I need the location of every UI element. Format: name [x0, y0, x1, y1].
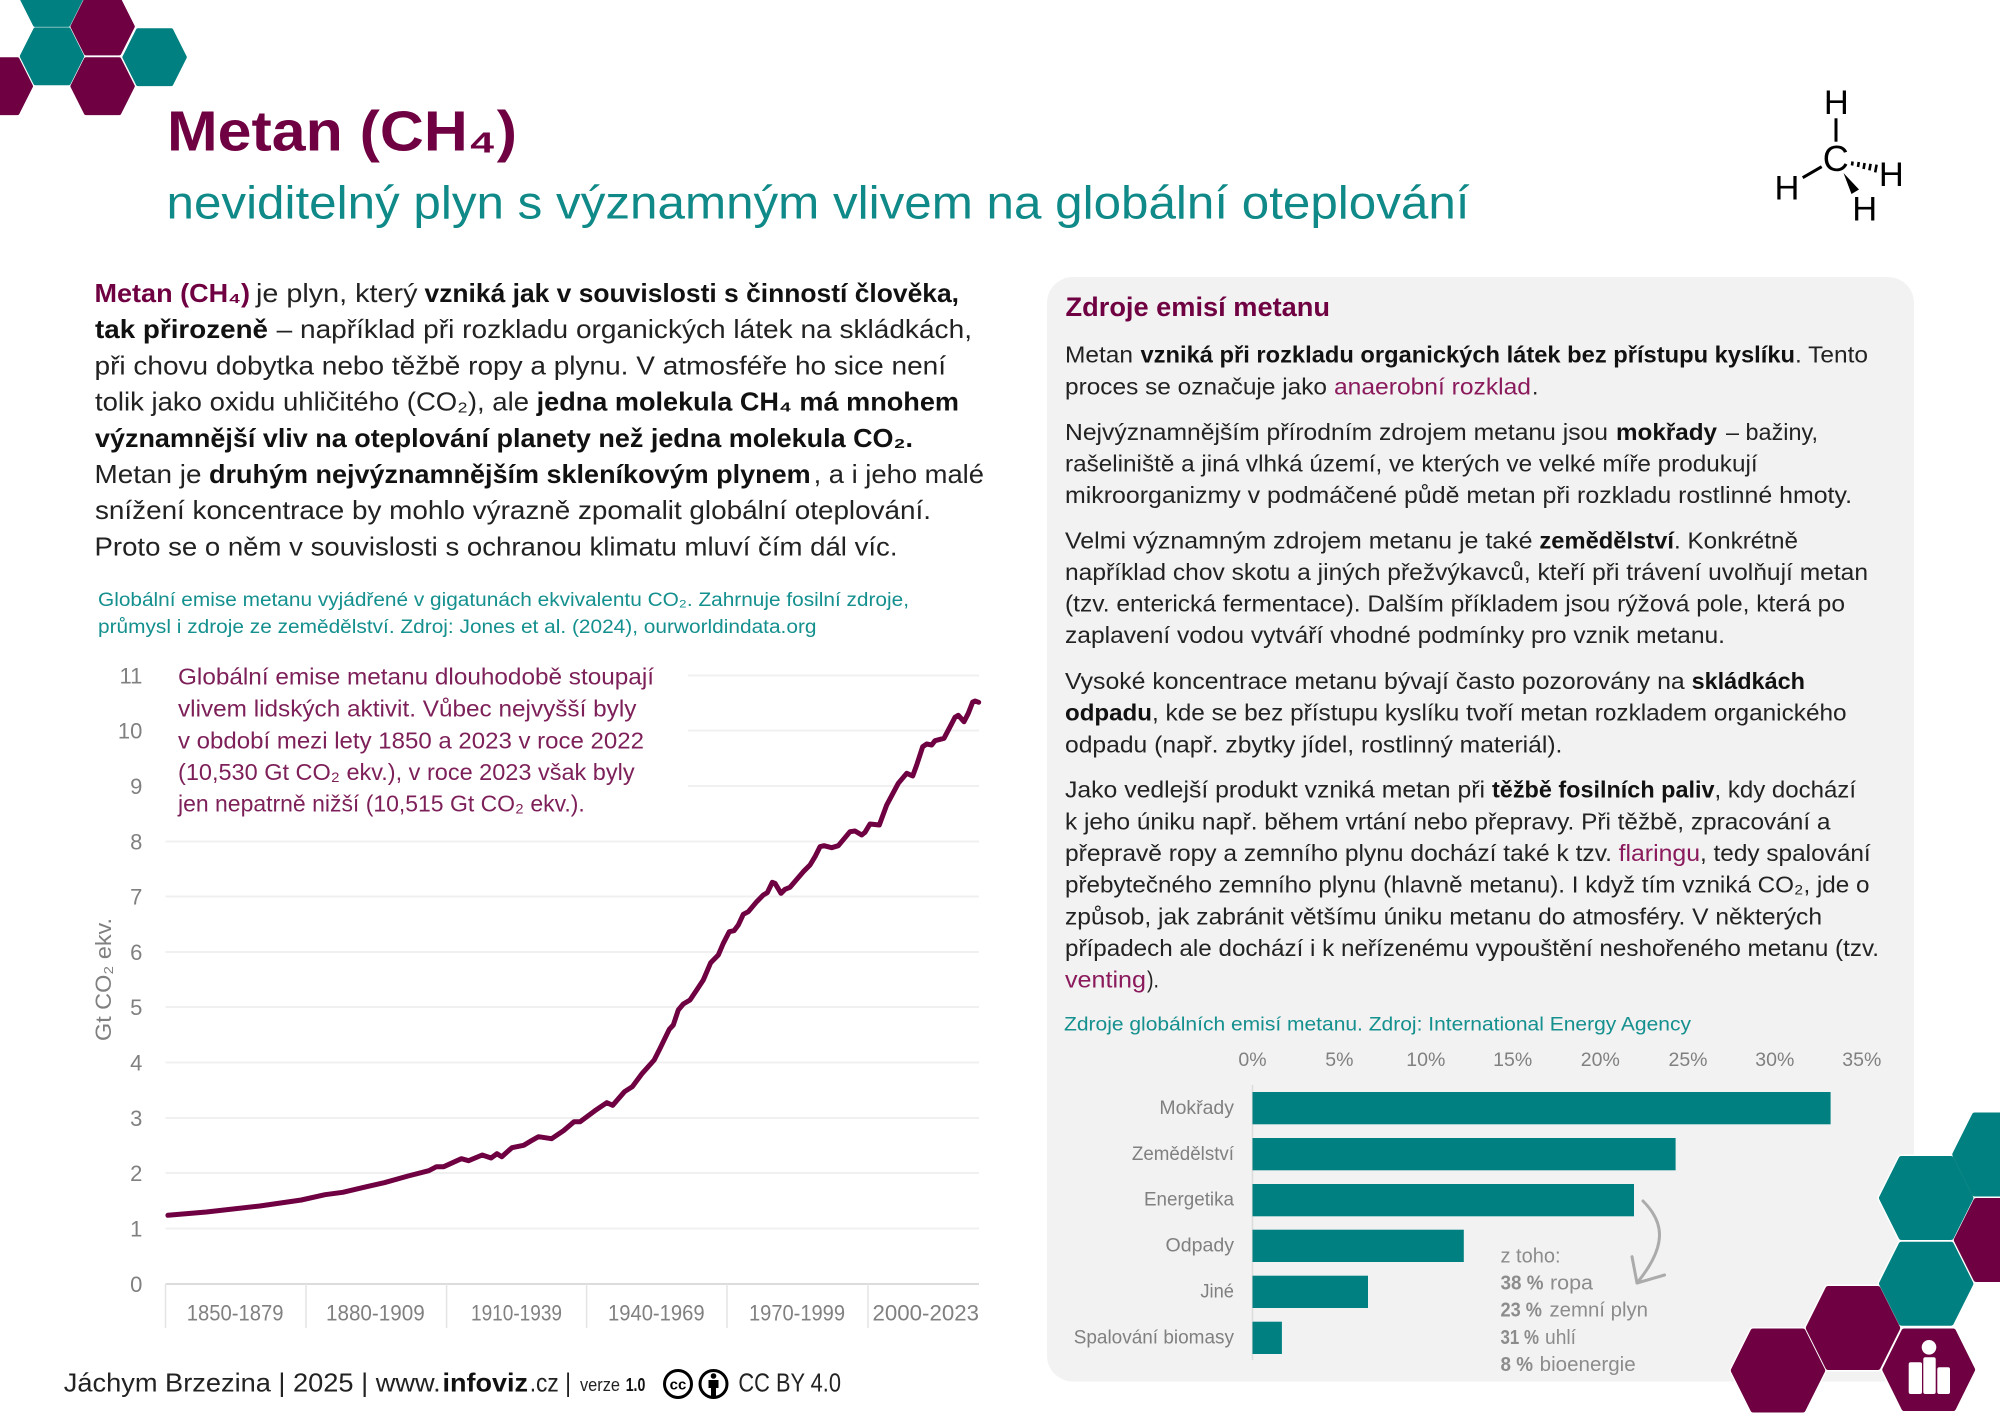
text block: introduction: je plyn, který — [255, 278, 418, 308]
footer: CC BY 4.0 — [738, 1368, 841, 1398]
decorative hexagons bottom right — [1734, 1116, 2000, 1410]
y axis labels: 9 — [130, 774, 142, 799]
percent axis labels — [1238, 1049, 1881, 1071]
callout: energy breakdown — [1500, 1246, 1648, 1376]
chart gridlines — [166, 676, 979, 1284]
bar: energy — [1144, 1184, 1634, 1216]
text block: anaerobic decomposition: . Tento — [1795, 342, 1868, 368]
chart period ticks — [166, 1284, 868, 1328]
y axis labels: 1 — [130, 1216, 142, 1242]
text block: introduction: tolik jako oxidu uhličitého (CO₂), ale — [95, 386, 529, 416]
callout: energy breakdown: ropa — [1550, 1272, 1594, 1294]
text block: introduction — [94, 278, 984, 562]
arrow: energy breakdown — [1632, 1201, 1665, 1283]
footer: infoviz — [442, 1368, 528, 1398]
icon: attribution — [700, 1370, 727, 1398]
text block: landfills: odpadu — [1065, 700, 1152, 726]
bar chart: sources of global methane emissions — [1074, 1049, 1881, 1360]
bar: waste — [1166, 1230, 1464, 1262]
callout: energy breakdown: zemní plyn — [1550, 1300, 1648, 1322]
text block: fossil fuels: k jeho úniku např. během vrtání nebo přepravy. Při těžbě, zpracování a — [1065, 808, 1831, 834]
callout: energy breakdown: uhlí — [1545, 1327, 1576, 1349]
text block: introduction: – například při rozkladu organických látek na skládkách, — [277, 314, 972, 344]
text block: introduction: vzniká jak v souvislosti s činností člověka, — [424, 278, 959, 308]
percent axis labels: 25% — [1668, 1049, 1708, 1071]
icon: methane molecule structure: H — [1775, 169, 1799, 207]
y axis labels: 11 — [120, 664, 142, 688]
y axis labels: 3 — [130, 1106, 142, 1131]
footer — [64, 1368, 841, 1398]
bar: biomass burning: Spalování biomasy — [1074, 1326, 1234, 1348]
y axis labels: 8 — [130, 830, 142, 854]
text block: fossil fuels: Jako vedlejší produkt vzniká metan při — [1065, 776, 1485, 802]
text block: wetlands: mikroorganizmy v podmáčené půdě metan při rozkladu rostlinné hmoty. — [1065, 482, 1852, 508]
text block: wetlands: mokřady — [1616, 419, 1717, 445]
y axis labels: 7 — [130, 884, 142, 910]
percent axis labels: 10% — [1406, 1049, 1445, 1071]
text block: wetlands: – bažiny, — [1726, 419, 1818, 445]
text block: landfills: , kde se bez přístupu kyslíku tvoří metan rozkladem organického — [1152, 700, 1847, 726]
icon: methane molecule structure: C — [1823, 138, 1849, 179]
icon: creative commons — [664, 1370, 692, 1398]
chart caption: průmysl i zdroje ze zemědělství. Zdroj: Jones et al. (2024), ourworldindata.org — [98, 617, 816, 638]
title: Metan (CH₄) — [167, 100, 517, 164]
text block: wetlands — [1065, 419, 1852, 508]
callout: energy breakdown: 8 % — [1500, 1354, 1533, 1376]
bar: wetlands — [1159, 1092, 1831, 1124]
text block: anaerobic decomposition: Metan — [1065, 342, 1133, 368]
text block: agriculture: například chov skotu a jiných přežvýkavců, kteří při trávení uvolňují metan — [1065, 559, 1868, 585]
callout: chart annotation: vlivem lidských aktivit. Vůbec nejvyšší byly — [178, 696, 637, 722]
text block: fossil fuels: venting — [1065, 967, 1146, 993]
icon: infographic logo hexagon — [1885, 1332, 1972, 1408]
percent axis labels: 20% — [1581, 1049, 1620, 1071]
text block: fossil fuels: ). — [1147, 967, 1159, 993]
footer: verze — [580, 1375, 620, 1395]
callout: energy breakdown: bioenergie — [1540, 1354, 1636, 1376]
text block: anaerobic decomposition: . — [1532, 373, 1538, 399]
x axis labels — [187, 1301, 979, 1326]
white gaps between hexagons — [1734, 1159, 1972, 1410]
line chart: global methane emissions — [91, 664, 979, 1328]
text block: landfills: skládkách — [1692, 668, 1805, 694]
subtitle: neviditelný plyn s významným vlivem na globální oteplování — [166, 176, 1470, 228]
text block: introduction: Proto se o něm v souvislosti s ochranou klimatu mluví čím dál víc. — [94, 532, 898, 562]
y axis labels: 0 — [130, 1272, 142, 1297]
icon: methane molecule structure: H — [1824, 84, 1849, 122]
y axis labels: 5 — [130, 995, 142, 1020]
callout: chart annotation: jen nepatrně nižší (10,515 Gt CO₂ ekv.). — [177, 791, 585, 817]
x axis labels: 1970-1999 — [749, 1301, 845, 1326]
callout: chart annotation — [177, 664, 655, 817]
footer: 1.0 — [626, 1375, 645, 1395]
callout: chart annotation: Globální emise metanu dlouhodobě stoupají — [178, 664, 655, 690]
y axis labels: 6 — [130, 940, 142, 965]
bar: agriculture — [1132, 1138, 1676, 1170]
text block: introduction: Metan (CH₄) — [94, 278, 250, 308]
text block: anaerobic decomposition — [1065, 342, 1868, 399]
percent axis labels: 30% — [1755, 1049, 1794, 1071]
text block: agriculture: zaplavení vodou vytváří vhodné podmínky pro vznik metanu. — [1065, 622, 1725, 648]
icon: methane molecule structure: H — [1852, 191, 1877, 229]
text block: introduction: jedna molekula CH₄ má mnohem — [536, 386, 959, 416]
text block: anaerobic decomposition: proces se označuje jako — [1065, 373, 1327, 399]
callout: chart annotation: v období mezi lety 1850 a 2023 v roce 2022 — [178, 727, 644, 753]
text block: introduction: druhým nejvýznamnějším skleníkovým plynem — [209, 459, 811, 489]
text block: anaerobic decomposition: vzniká při rozkladu organických látek bez přístupu kyslíku — [1140, 342, 1795, 368]
text block: fossil fuels: těžbě fosilních paliv — [1492, 776, 1715, 802]
text block: introduction: snížení koncentrace by mohlo výrazně zpomalit globální oteplování. — [95, 495, 931, 525]
text block: agriculture — [1065, 527, 1868, 648]
decorative hexagons top left — [0, 0, 185, 113]
bar: other — [1200, 1276, 1368, 1308]
text block: fossil fuels: způsob, jak zabránit většímu úniku metanu do atmosféry. V některých — [1065, 903, 1822, 929]
text block: fossil fuels: přebytečného zemního plynu (hlavně metanu). I když tím vzniká CO₂, jde o — [1065, 872, 1870, 898]
text block: introduction: při chovu dobytka nebo těžbě ropy a plynu. V atmosféře ho sice není — [94, 350, 947, 380]
callout: energy breakdown: 38 % — [1500, 1272, 1544, 1294]
x axis labels: 1880-1909 — [326, 1301, 425, 1326]
percent axis labels: 15% — [1493, 1049, 1532, 1071]
bar: wetlands: Mokřady — [1159, 1097, 1234, 1119]
percent axis labels: 5% — [1325, 1049, 1353, 1071]
footer: .cz | — [530, 1368, 571, 1398]
y axis labels: 4 — [130, 1050, 142, 1076]
bar: biomass burning — [1074, 1322, 1282, 1354]
text block: agriculture: (tzv. enterická fermentace). Dalším příkladem jsou rýžová pole, která po — [1065, 591, 1845, 617]
chart caption: Globální emise metanu vyjádřené v gigatunách ekvivalentu CO₂. Zahrnuje fosilní zdroje, — [98, 590, 909, 611]
text block: fossil fuels: , kdy dochází — [1714, 776, 1857, 802]
x axis labels: 1910-1939 — [471, 1301, 562, 1326]
text block: wetlands: Nejvýznamnějším přírodním zdrojem metanu jsou — [1065, 419, 1608, 445]
text block: landfills: Vysoké koncentrace metanu bývají často pozorovány na — [1065, 668, 1685, 694]
text block: landfills — [1065, 668, 1847, 758]
panel: sources of emissions background — [1047, 277, 1914, 1382]
y axis labels — [118, 664, 142, 1297]
callout: energy breakdown: 31 % — [1500, 1327, 1539, 1349]
bar: energy: Energetika — [1144, 1189, 1234, 1211]
icon: methane molecule structure — [1775, 84, 1904, 229]
x axis labels: 1850-1879 — [187, 1301, 284, 1326]
text block: fossil fuels: flaringu — [1619, 840, 1700, 866]
percent axis labels: 0% — [1238, 1049, 1267, 1071]
footer: Jáchym Brzezina | 2025 | www. — [64, 1368, 441, 1398]
y axis labels: 10 — [118, 718, 142, 744]
bar chart caption: Zdroje globálních emisí metanu. Zdroj: International Energy Agency — [1064, 1015, 1692, 1036]
y axis labels: 2 — [130, 1161, 142, 1186]
text block: anaerobic decomposition: anaerobní rozklad — [1334, 373, 1531, 399]
text block: introduction: , a i jeho malé — [814, 459, 984, 489]
text block: fossil fuels — [1065, 776, 1879, 993]
emissions line — [168, 701, 979, 1215]
text block: agriculture: . Konkrétně — [1674, 527, 1798, 553]
text block: introduction: Metan je — [94, 459, 202, 489]
bar: waste: Odpady — [1166, 1235, 1234, 1257]
callout: energy breakdown: 23 % — [1500, 1300, 1542, 1322]
text block: agriculture: zemědělství — [1539, 527, 1676, 553]
text block: introduction: tak přirozeně — [95, 314, 268, 344]
icon: methane molecule structure: H — [1879, 156, 1904, 194]
text block: agriculture: Velmi významným zdrojem metanu je také — [1065, 527, 1532, 553]
text block: fossil fuels: přepravě ropy a zemního plynu dochází také k tzv. — [1065, 840, 1612, 866]
callout: energy breakdown: z toho: — [1500, 1246, 1560, 1268]
icon: creative commons: cc — [670, 1376, 686, 1394]
percent axis labels: 35% — [1842, 1049, 1881, 1071]
text block: introduction: významnější vliv na oteplování planety než jedna molekula CO₂. — [95, 423, 913, 453]
bar: other: Jiné — [1200, 1281, 1234, 1303]
heading: sources of emissions: Zdroje emisí metanu — [1066, 292, 1330, 322]
y axis title: Gt CO₂ ekv. — [91, 918, 116, 1041]
chart caption — [98, 590, 909, 638]
x axis labels: 1940-1969 — [608, 1301, 705, 1326]
bar: agriculture: Zemědělství — [1132, 1143, 1235, 1165]
callout: chart annotation: (10,530 Gt CO₂ ekv.), v roce 2023 však byly — [178, 759, 635, 785]
text block: wetlands: rašeliniště a jiná vlhká území, ve kterých ve velké míře produkují — [1065, 451, 1758, 477]
text block: fossil fuels: , tedy spalování — [1700, 840, 1871, 866]
text block: fossil fuels: případech ale dochází i k neřízenému vypouštění neshořeného metanu (tzv. — [1065, 935, 1879, 961]
text block: landfills: odpadu (např. zbytky jídel, rostlinný materiál). — [1065, 732, 1562, 758]
x axis labels: 2000-2023 — [872, 1301, 979, 1326]
